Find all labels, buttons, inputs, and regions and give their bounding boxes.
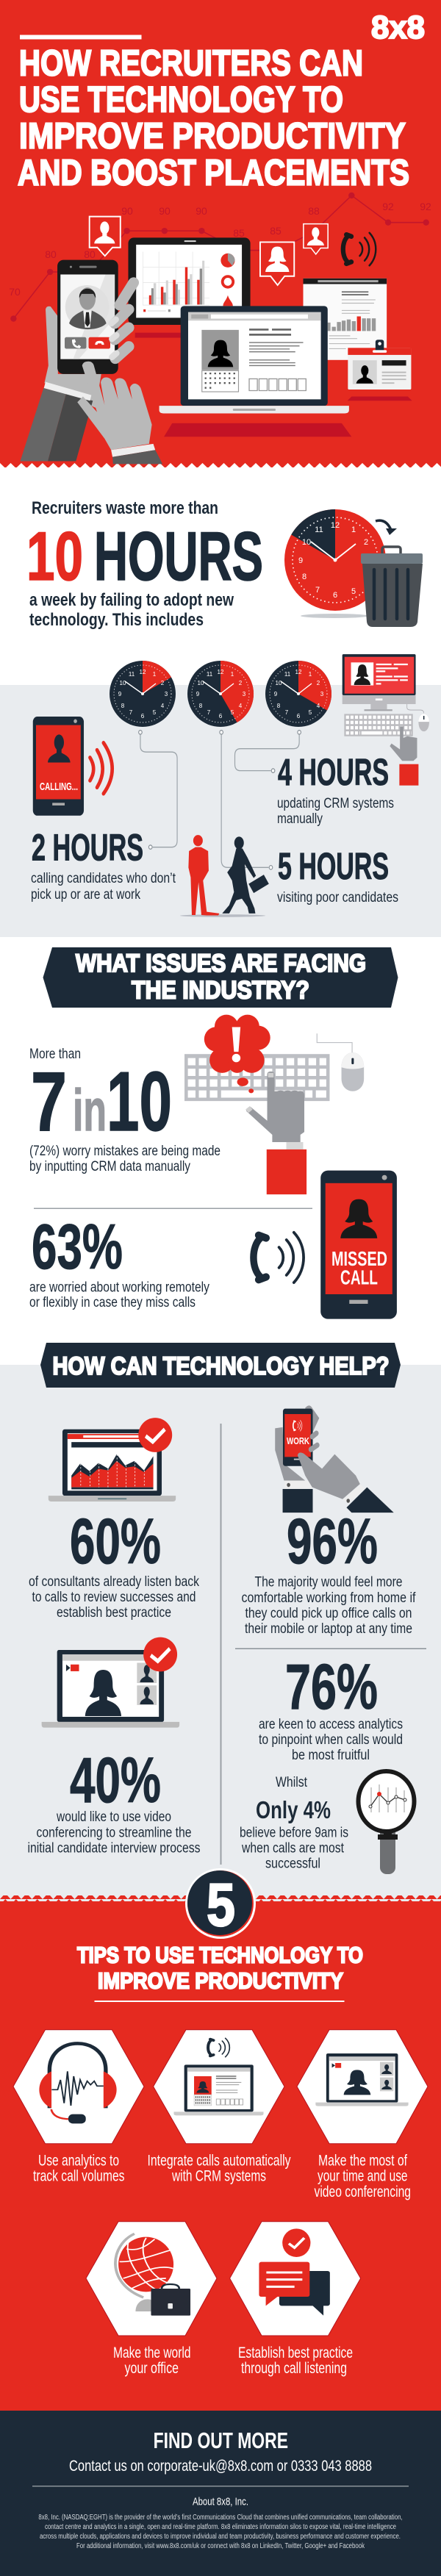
background line chart [9,193,431,322]
illustration: devices and hands [21,217,412,464]
background line chart: 90 [196,205,207,217]
icon: computer with candidate record [343,654,429,786]
heading banner [43,947,398,1008]
icon: clock four hours: 12 [295,669,302,675]
icon: hands with work phone [275,1405,394,1513]
stat: 63 percent: are worried about working remotely [29,1280,209,1295]
heading [77,1942,363,1993]
heading banner [40,1343,401,1388]
stat: 60 percent: 60% [70,1506,161,1577]
icon: magnifying glass over chart [359,1771,415,1874]
icon: two business people [180,835,269,917]
icon: phone with missed call: MISSED [331,1247,387,1270]
icon: clock going into bin: 6 [333,591,337,600]
icon: clock four hours: 11 [284,671,291,678]
heading: IMPROVE PRODUCTIVITY [98,1968,343,1993]
stat: 40 percent: would like to use video [56,1809,171,1825]
panel: hero header [0,0,441,467]
panel: ten hours intro [26,498,423,630]
label: calling on screen: CALLING... [40,781,78,793]
background line chart: 92 [382,201,394,212]
tip 2: CRM integration: with CRM systems [171,2168,266,2185]
stat: 60 percent [29,1506,199,1621]
icon: clock two hours: 2 [161,680,165,686]
stat: only 4 percent [240,1775,348,1871]
icon: clock going into bin: 8 [302,573,306,581]
stat: 76 percent: be most fruitful [292,1748,370,1763]
stat: 5 hours: visiting poor candidates [277,890,398,905]
heading: find out more: FIND OUT MORE [154,2428,288,2453]
icon: browser window [303,279,387,360]
stat: only 4 percent: Whilst [276,1775,308,1790]
stat: 4 hours: updating CRM systems [277,796,394,811]
background line chart: 90 [121,205,133,217]
stat: 2 hours: pick up or are at work [31,887,140,903]
footer rule [32,2486,409,2487]
icon: clock two hours: 4 [161,703,165,709]
icon: clock five hours [187,661,254,727]
background line chart: 80 [84,248,96,260]
big stat: 10 hours: 10 [26,517,83,595]
icon: clock two hours: 7 [129,709,133,716]
stat: 40 percent [28,1745,200,1856]
heading rule [94,2001,344,2002]
icon: clock four hours: 4 [317,703,320,709]
stat: 96 percent: 96% [287,1506,378,1577]
icon: clock going into bin [284,509,423,627]
stat: 96 percent [241,1506,416,1637]
icon: clock five hours: 9 [196,691,200,697]
stat: 63 percent [29,1212,209,1310]
icon: clock going into bin: 1 [351,525,356,534]
icon: clock two hours: 6 [141,713,145,720]
icon: clock five hours: 1 [231,671,234,678]
heading: TIPS TO USE TECHNOLOGY TO [77,1942,363,1968]
intro text: Recruiters waste more than [32,498,218,518]
icon: pointing hand and sleeves [21,362,162,464]
about heading: About 8x8, Inc. [193,2496,248,2508]
background line chart: 90 [159,205,171,217]
stat: 4 hours: manually [277,811,323,827]
stat: 60 percent: of consultants already listen back [29,1574,199,1590]
tip 2: CRM integration [147,2030,291,2185]
stat: 63 percent: or flexibly in case they miss calls [29,1295,196,1310]
stat: 2 hours: calling candidates who don’t [31,871,176,886]
icon: clock four hours: 6 [297,713,301,720]
stat: 7 in 10 [29,1047,220,1174]
column divider [220,1424,222,1865]
icon: video conference laptop and tick [42,1637,179,1728]
tip 5: call listening: Establish best practice [238,2344,353,2361]
intro text continued: a week by failing to adopt new [29,590,234,610]
background line chart: 88 [308,205,320,217]
stat: 76 percent [259,1651,403,1763]
stat: 40 percent: initial candidate interview process [28,1840,200,1856]
icon: candidate pin woman [260,242,294,285]
stat: 63 percent: 63% [32,1212,123,1282]
icon: clock going into bin: 12 [331,521,340,530]
icon: clock five hours: 12 [218,669,224,675]
icon: clock four hours: 10 [276,680,282,686]
icon: clock going into bin: 2 [364,538,368,547]
icon: clock two hours: 5 [153,709,157,716]
tip 1: analytics: Use analytics to [38,2153,119,2170]
intro text continued [29,590,234,630]
stat: only 4 percent: believe before 9am is [240,1826,348,1840]
icon: hands with work phone: WORK [287,1435,309,1446]
tip 5: call listening: through call listening [241,2360,347,2377]
stat: only 4 percent: Only 4% [256,1796,331,1823]
icon: clock two hours: 3 [165,691,168,697]
icon: clock going into bin: 9 [298,556,303,565]
tip 5: call listening [230,2222,361,2377]
panel: hours breakdown [0,654,441,937]
panel: how can technology help [0,1343,441,1901]
big stat: 10 hours [26,517,263,595]
badge: number 5 [185,1868,256,1939]
icon: ringing handset [343,233,376,265]
icon: clock five hours: 3 [243,691,246,697]
icon: clock five hours: 5 [231,709,234,716]
icon: clock two hours: 8 [121,703,125,709]
icon: laptop with analytics and tick [49,1418,176,1502]
icon: phone with missed call [320,1171,397,1319]
tip 2: CRM integration: Integrate calls automatically [147,2153,291,2170]
connector lines [139,731,301,869]
stat: 60 percent: to calls to review successes and [32,1590,196,1605]
background line chart: 80 [45,248,57,260]
tip 4: world office [86,2222,217,2377]
stat: 7 in 10: 10 [107,1055,172,1149]
icon: laptop with candidate profile [159,306,351,437]
stat: 7 in 10: (72%) worry mistakes are being made [29,1144,220,1159]
stat: 7 in 10: More than [29,1047,81,1062]
icon: clock two hours: 10 [120,680,126,686]
stat: only 4 percent: when calls are most [241,1840,345,1856]
icon: clock five hours: 4 [239,703,243,709]
tip 1: analytics: track call volumes [33,2168,125,2185]
icon: clock four hours: 8 [277,703,281,709]
stat: 4 hours [277,751,394,827]
stat: 7 in 10: in [73,1077,107,1143]
stat: 40 percent: 40% [70,1745,161,1816]
big stat: 10 hours: HOURS [94,517,263,595]
icon: clock four hours: 3 [320,691,324,697]
background line chart: 70 [9,286,21,298]
stat: 76 percent: 76% [285,1651,378,1723]
icon: phone with missed call: CALL [340,1266,378,1289]
icon: clock two hours: 11 [129,671,135,678]
divider [34,1208,312,1209]
icon: keyboard, mouse, hand and alert [184,1015,364,1194]
icon: hand holding smartphone [44,260,118,408]
stat: 4 hours: 4 HOURS [278,751,389,793]
icon: clock four hours: 1 [309,671,312,678]
icon: candidate pin man [90,217,121,256]
badge: number 5: 5 [207,1870,235,1939]
title: HOW RECRUITERS CAN [19,44,363,84]
stat: 2 hours: 2 HOURS [32,826,143,869]
stat: only 4 percent: successful [265,1856,320,1871]
title [18,44,409,193]
divider [235,1648,426,1649]
icon: ringing handset navy [254,1233,304,1282]
icon: clock four hours: 2 [317,680,320,686]
title rule [20,35,141,40]
panel: five tips [0,1868,441,2411]
icon: clock going into bin: 5 [351,587,356,596]
about text: For additional information, visit www.8x8.com/uk or connect with 8x8 on LinkedIn, Twitter, Google+ and Facebook [76,2542,365,2550]
stat: 2 hours [31,826,176,903]
tip 1: analytics [13,2030,144,2185]
stat: 40 percent: conferencing to streamline the [37,1826,191,1840]
stat: 76 percent: to pinpoint when calls would [259,1732,403,1748]
icon: clock going into bin: 10 [302,538,311,547]
icon: clock going into bin: 11 [315,525,323,534]
icon: clock four hours: 7 [285,709,289,716]
stat: 96 percent: The majority would feel more [254,1574,403,1590]
icon: clock five hours: 2 [239,680,243,686]
icon: clock four hours [265,661,331,727]
heading banner: WHAT ISSUES ARE FACING [76,950,366,977]
icon: clock four hours: 9 [274,691,278,697]
stat: 7 in 10: 7 [31,1055,67,1149]
stat: 76 percent: are keen to access analytics [259,1717,403,1732]
panel: issues facing the industry [29,947,398,1319]
panel: footer [0,2411,441,2576]
icon: clock going into bin: 7 [315,586,320,595]
icon: clock five hours: 10 [198,680,204,686]
intro text continued: technology. This includes [29,610,204,630]
icon: clock two hours: 12 [140,669,146,675]
icon: clock two hours [110,661,176,727]
stat: 60 percent: establish best practice [57,1605,171,1621]
stat: 5 hours: 5 HOURS [278,845,389,887]
icon: candidate pin man small [304,224,328,254]
tip 4: world office: your office [125,2360,179,2377]
stat: 7 in 10: by inputting CRM data manually [29,1159,190,1174]
about text [38,2514,403,2550]
tip 3: video conferencing [297,2030,428,2200]
icon: tablet with charts [128,237,251,338]
stat: 96 percent: they could pick up office calls on [245,1606,412,1621]
icon: clock five hours: 11 [207,671,213,678]
stat: 5 hours [277,845,398,905]
tip 3: video conferencing: Make the most of [318,2153,407,2170]
icon: clock five hours: 6 [219,713,223,720]
icon: fingers over phone [112,283,134,359]
background line chart: 85 [270,225,282,237]
background line chart: 85 [233,227,245,239]
icon: ID card [348,340,412,401]
icon: clock five hours: 8 [199,703,203,709]
tip 3: video conferencing: your time and use [318,2168,407,2185]
icon: clock two hours: 1 [153,671,157,678]
title: USE TECHNOLOGY TO [19,80,343,120]
tip 3: video conferencing: video conferencing [315,2184,411,2200]
icon: phone calling [33,717,112,816]
logo: 8x8: 8x8 [371,10,425,46]
icon: clock four hours: 5 [309,709,312,716]
heading banner: HOW CAN TECHNOLOGY HELP? [53,1352,390,1380]
heading banner: THE INDUSTRY? [132,976,309,1004]
background line chart: 92 [420,201,431,212]
icon: clock five hours: 7 [207,709,211,716]
icon: clock two hours: 9 [118,691,122,697]
tip 4: world office: Make the world [113,2344,191,2361]
